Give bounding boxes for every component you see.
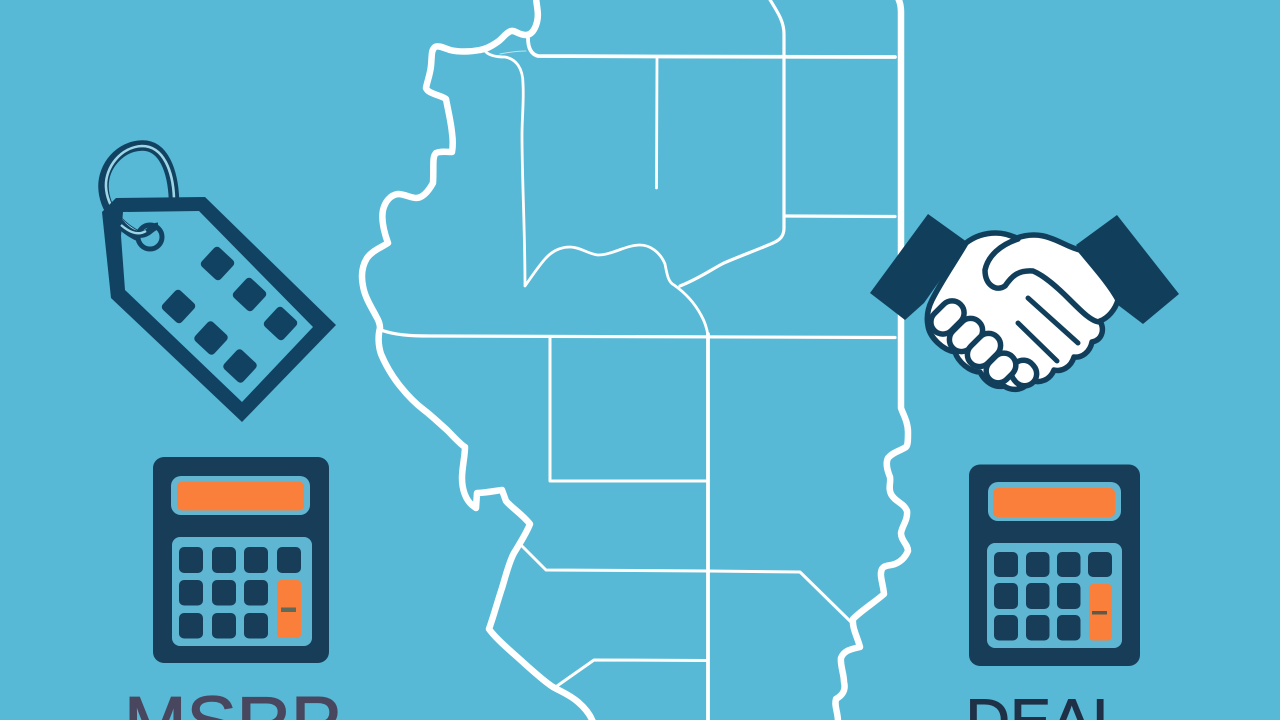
region line: short vertical <box>655 58 658 188</box>
calculator body <box>969 464 1140 666</box>
hands <box>927 233 1118 389</box>
fingers and thumb lines <box>985 239 1100 361</box>
orange key <box>277 580 301 638</box>
region line: far south <box>557 660 707 686</box>
icon: price tag <box>102 145 336 422</box>
region line: northern boundary <box>528 38 895 57</box>
icon: left calculator <box>153 457 329 663</box>
knuckles <box>926 296 1042 391</box>
region line: faint river branch <box>500 51 526 54</box>
region line: central vertical <box>706 334 710 720</box>
calculator display <box>171 476 310 515</box>
region line: central box <box>550 337 707 481</box>
calculator display <box>988 482 1121 521</box>
region line: small east county <box>785 214 895 218</box>
tag string loop <box>103 145 174 238</box>
map outline: east border <box>835 0 908 720</box>
region line: north-west county <box>486 52 708 336</box>
region line: central horizontal <box>381 330 895 338</box>
map: state outline with internal regions <box>362 0 908 720</box>
tag eyelet <box>138 225 162 249</box>
icon: right calculator <box>969 464 1140 666</box>
left cuff <box>870 214 967 320</box>
calculator keypad <box>172 537 312 646</box>
region line: north-east county <box>680 0 784 286</box>
calculator keypad <box>987 543 1122 648</box>
tag body <box>102 197 336 422</box>
icon: handshake <box>870 214 1179 391</box>
calculator body <box>153 457 329 663</box>
tag dots <box>160 245 299 384</box>
orange key <box>1089 584 1112 640</box>
right cuff <box>1076 215 1179 324</box>
map outline: west border <box>362 0 593 720</box>
region line: southern boundary <box>522 546 851 622</box>
